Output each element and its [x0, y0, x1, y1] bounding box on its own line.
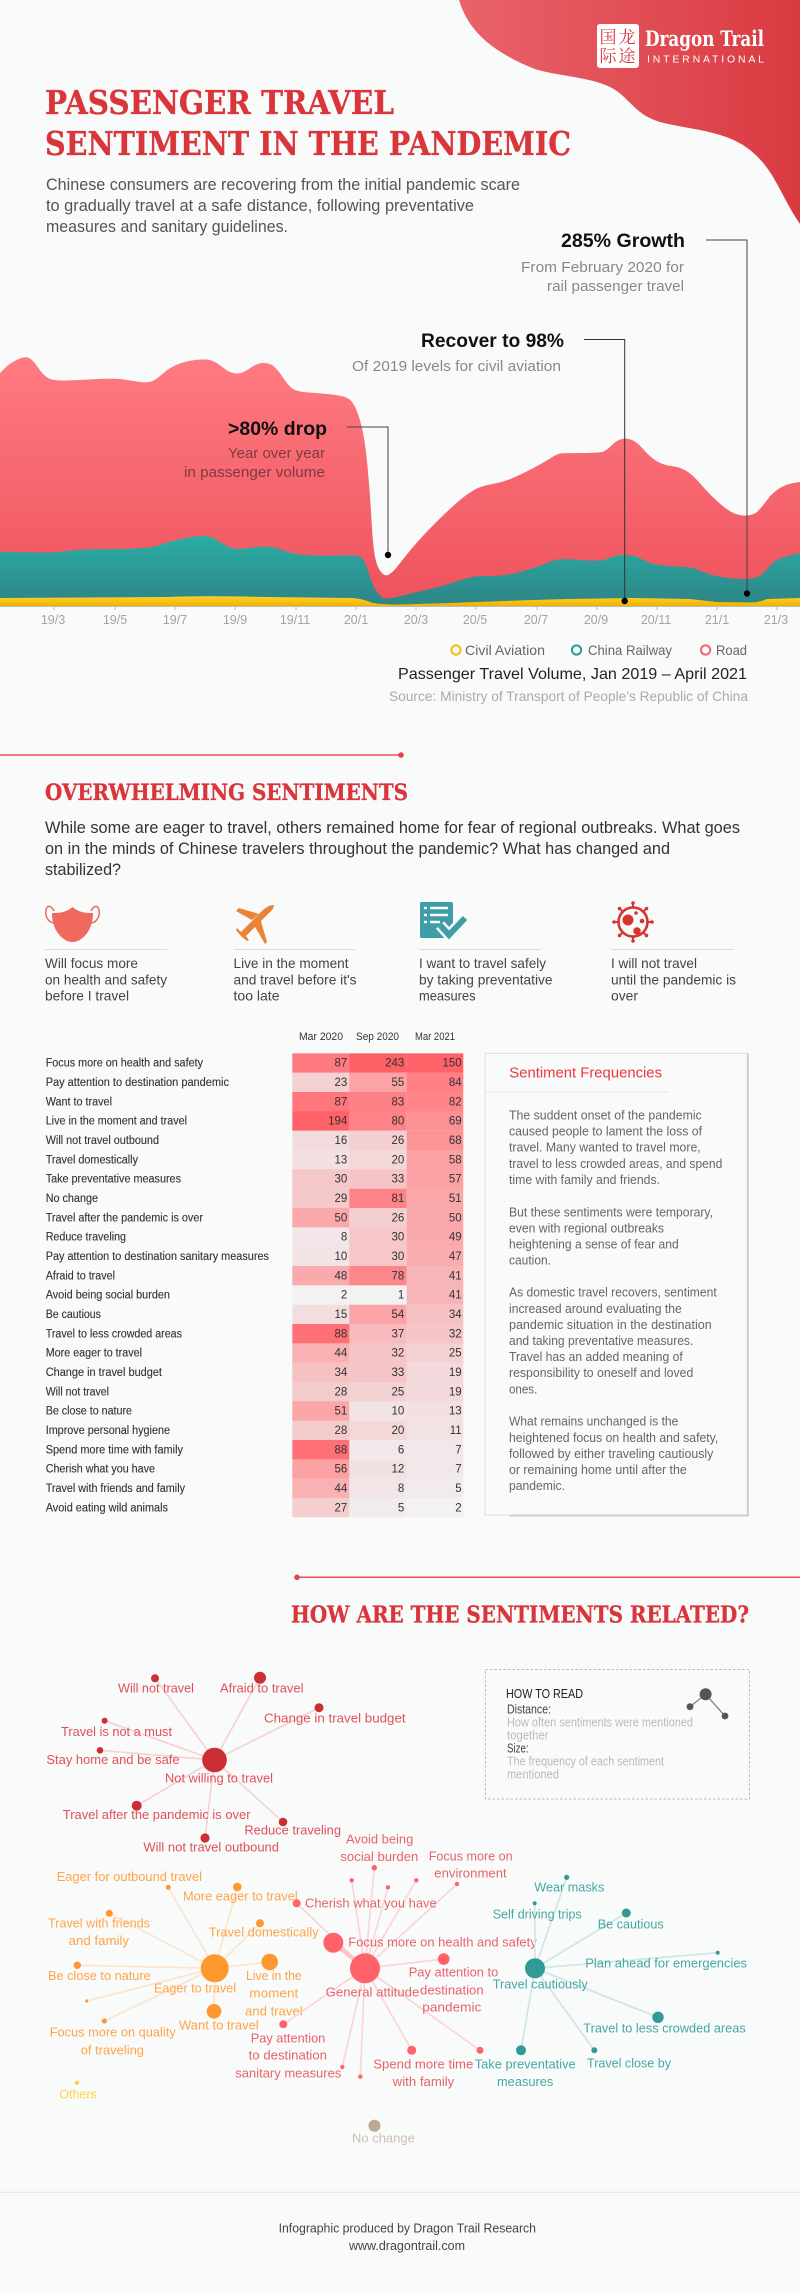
panel body text: heightened focus on health and safety,	[509, 1430, 718, 1445]
row: take preventative measures	[46, 1169, 463, 1189]
row: improve personal hygiene	[46, 1421, 463, 1440]
footer credit	[279, 2220, 536, 2253]
row: pay attention to destination pandemic: 55	[392, 1077, 404, 1089]
row: spend more time with family: 6	[398, 1444, 404, 1456]
panel body text: increased around evaluating the	[509, 1301, 682, 1316]
title: SENTIMENT IN THE PANDEMIC	[45, 124, 571, 163]
icon: checklist	[420, 902, 465, 938]
row: travel with friends and family: 8	[398, 1483, 404, 1495]
row: will not travel outbound: 68	[449, 1135, 462, 1147]
row: travel after the pandemic is over: Travel after the pandemic is over	[46, 1212, 203, 1224]
row: be close to nature: 10	[392, 1406, 404, 1418]
row: want to travel: 87	[335, 1096, 347, 1108]
network cluster: general attitude: Pay attention	[251, 2030, 325, 2045]
sentiment item: travel safely	[419, 902, 553, 1004]
network cluster: eager to travel: Want to travel	[179, 2017, 259, 2032]
callout: recover to 98%: Of 2019 levels for civil aviation	[352, 358, 561, 375]
network cluster: travel cautiously: Plan ahead for emergencies	[585, 1955, 747, 1970]
network node: no change	[352, 2120, 415, 2145]
network cluster: eager to travel	[48, 1869, 319, 2057]
row: no change: 29	[335, 1193, 347, 1205]
row: travel to less crowded areas: Travel to less crowded areas	[46, 1328, 182, 1340]
row: no change: 51	[449, 1193, 462, 1205]
sentiment item: will not travel	[611, 901, 736, 1004]
row: take preventative measures: 57	[449, 1174, 462, 1186]
row: travel to less crowded areas: 32	[449, 1328, 462, 1340]
row: be cautious	[46, 1305, 463, 1324]
row: no change: 81	[392, 1193, 404, 1205]
sentiment item: health and safety: before I travel	[45, 988, 129, 1004]
network cluster: travel cautiously: measures	[497, 2074, 554, 2089]
network cluster: eager to travel: Live in the	[246, 1968, 302, 1983]
how to read legend: together	[507, 1728, 548, 1742]
row: travel after the pandemic is over: 50	[449, 1212, 462, 1224]
row: more eager to travel: More eager to travel	[46, 1348, 142, 1360]
row: live in the moment and travel: 69	[449, 1116, 462, 1128]
row: want to travel: 83	[392, 1096, 404, 1108]
row: improve personal hygiene: 11	[450, 1425, 462, 1437]
row: change in travel budget: 34	[335, 1367, 348, 1379]
how to read legend: How often sentiments were mentioned	[507, 1715, 693, 1729]
x axis labels: 20/5	[463, 613, 487, 627]
table column headers: Mar 2021	[415, 1031, 455, 1043]
network cluster: not willing to travel: Change in travel budget	[264, 1710, 406, 1725]
row: avoid being social burden	[46, 1285, 463, 1305]
row: afraid to travel: Afraid to travel	[46, 1270, 115, 1282]
network cluster: eager to travel: Focus more on quality	[50, 2025, 176, 2040]
network cluster: not willing to travel: Not willing to travel	[165, 1771, 273, 1786]
row: take preventative measures: 30	[335, 1174, 347, 1186]
row: be close to nature	[46, 1401, 463, 1421]
row: travel domestically: 13	[335, 1154, 347, 1166]
network cluster: not willing to travel: Travel after the pandemic is over	[63, 1807, 251, 1822]
row: reduce traveling	[46, 1227, 463, 1247]
area chart: passenger travel volume	[0, 357, 800, 627]
panel body text: caution.	[509, 1253, 551, 1268]
network cluster: general attitude: destination	[420, 1982, 484, 1997]
chart legend: China Railway	[588, 642, 672, 658]
sentiment item: travel safely: by taking preventative	[419, 972, 553, 988]
network cluster: eager to travel: and family	[69, 1933, 130, 1948]
sentiment item: live in the moment: and travel before it's	[234, 972, 356, 988]
sentiment item: live in the moment	[234, 905, 356, 1004]
row: avoid eating wild animals: 27	[335, 1502, 347, 1514]
panel heading: Sentiment Frequencies	[509, 1065, 662, 1082]
row: live in the moment and travel: Live in the moment and travel	[46, 1116, 187, 1128]
row: no change	[46, 1189, 463, 1208]
how to read legend	[486, 1670, 750, 1799]
table column headers: Sep 2020	[356, 1031, 399, 1043]
intro text: measures and sanitary guidelines.	[46, 218, 288, 236]
row: avoid being social burden: 2	[341, 1290, 347, 1302]
row: more eager to travel: 25	[449, 1348, 462, 1360]
road area	[0, 357, 800, 606]
logo: Dragon Trail International	[597, 23, 764, 68]
callout: over 80% drop: Year over year	[228, 445, 325, 462]
intro text: to gradually travel at a safe distance, following preventative	[46, 197, 474, 215]
row: travel domestically: Travel domestically	[46, 1154, 138, 1166]
row: be cautious: 34	[449, 1309, 462, 1321]
row: pay attention to destination sanitary measures: 47	[449, 1251, 462, 1263]
table column headers	[299, 1031, 455, 1043]
china railway area	[0, 536, 800, 606]
row: be cautious: Be cautious	[46, 1309, 101, 1321]
intro text: Chinese consumers are recovering from the initial pandemic scare	[46, 176, 520, 194]
network cluster: eager to travel: Travel with friends	[48, 1915, 150, 1930]
title: PASSENGER TRAVEL	[45, 83, 394, 122]
network cluster: not willing to travel: Will not travel outbound	[143, 1840, 279, 1855]
network cluster: travel cautiously: Travel close by	[587, 2055, 671, 2070]
row: travel after the pandemic is over	[46, 1208, 463, 1228]
network cluster: eager to travel: of traveling	[81, 2042, 144, 2057]
callout: recover to 98%: Recover to 98%	[421, 331, 564, 352]
network cluster: travel cautiously: Take preventative	[475, 2056, 576, 2071]
row: travel to less crowded areas: 88	[335, 1328, 347, 1340]
row: avoid eating wild animals	[46, 1498, 463, 1517]
x axis labels	[41, 606, 788, 627]
sentiment item: health and safety	[45, 906, 167, 1004]
row: be close to nature: Be close to nature	[46, 1406, 132, 1418]
row: want to travel: Want to travel	[46, 1096, 112, 1108]
callout: over 80% drop	[184, 419, 391, 558]
row: spend more time with family: 88	[335, 1444, 347, 1456]
callout: recover to 98%	[352, 331, 628, 604]
network cluster: general attitude: environment	[434, 1866, 507, 1881]
row: live in the moment and travel: 80	[392, 1116, 404, 1128]
sentiment item: health and safety: Will focus more	[45, 955, 138, 971]
panel body text: As domestic travel recovers, sentiment	[509, 1285, 717, 1300]
network cluster: travel cautiously: Travel cautiously	[493, 1976, 588, 1991]
network cluster: general attitude: with family	[392, 2074, 455, 2089]
panel body text: pandemic.	[509, 1478, 565, 1493]
row: be close to nature: 13	[449, 1406, 462, 1418]
panel body text: travel to less crowded areas, and spend	[509, 1156, 722, 1171]
chart legend	[451, 642, 747, 658]
row: pay attention to destination pandemic: Pay attention to destination pandemic	[46, 1077, 229, 1089]
network node: no change: No change	[352, 2130, 415, 2145]
row: will not travel outbound: Will not travel outbound	[46, 1135, 159, 1147]
row: will not travel: 25	[392, 1386, 404, 1398]
chart caption and source: Passenger Travel Volume, Jan 2019 – April 2021	[398, 666, 747, 683]
section intro text: on in the minds of Chinese travelers throughout the pandemic? What has changed and	[45, 839, 670, 858]
panel body text: The suddent onset of the pandemic	[509, 1108, 702, 1122]
network cluster: general attitude: Spend more time	[373, 2056, 473, 2071]
table column headers: Mar 2020	[299, 1031, 343, 1043]
network cluster: general attitude	[235, 1831, 537, 2089]
network cluster: eager to travel: and travel	[245, 2003, 303, 2018]
row: will not travel: 28	[335, 1386, 347, 1398]
row: more eager to travel: 44	[335, 1348, 348, 1360]
row: travel with friends and family: 5	[455, 1483, 462, 1495]
row: travel to less crowded areas: 37	[392, 1328, 404, 1340]
panel body text: responsibility to oneself and loved	[509, 1365, 693, 1380]
row: be cautious: 15	[335, 1309, 347, 1321]
row: be cautious: 54	[392, 1309, 405, 1321]
section intro text: stabilized?	[45, 860, 121, 879]
row: afraid to travel: 41	[449, 1270, 462, 1282]
chart caption and source: Source: Ministry of Transport of People's Republic of China	[389, 688, 748, 704]
panel body text: caused people to lament the loss of	[509, 1124, 702, 1139]
network cluster: eager to travel: Travel domestically	[209, 1925, 319, 1940]
row: pay attention to destination sanitary measures: 10	[335, 1251, 347, 1263]
row: avoid eating wild animals: 5	[398, 1502, 404, 1514]
network node: others: Others	[59, 2086, 97, 2101]
x axis labels: 20/11	[641, 613, 671, 627]
network cluster: travel cautiously: Self driving trips	[493, 1906, 582, 1921]
row: take preventative measures: Take preventative measures	[46, 1174, 181, 1186]
sentiment item: will not travel: over	[611, 988, 638, 1004]
row: travel with friends and family	[46, 1479, 463, 1498]
network cluster: not willing to travel: Reduce traveling	[244, 1822, 341, 1837]
row: pay attention to destination sanitary measures	[46, 1247, 463, 1266]
row: focus more on health and safety: 150	[443, 1058, 462, 1070]
row: avoid being social burden: Avoid being social burden	[46, 1290, 170, 1302]
sentiment frequency heat table	[46, 1031, 463, 1517]
row: be close to nature: 51	[335, 1406, 347, 1418]
row: reduce traveling: 49	[449, 1232, 462, 1244]
network cluster: general attitude: Focus more on	[429, 1848, 513, 1863]
section intro text: While some are eager to travel, others remained home for fear of regional outbreaks. What goes	[45, 818, 740, 837]
section intro text	[45, 818, 740, 879]
row: live in the moment and travel: 194	[328, 1116, 348, 1128]
row: pay attention to destination sanitary measures: 30	[392, 1251, 404, 1263]
panel body text: time with family and friends.	[509, 1172, 660, 1187]
panel body text: But these sentiments were temporary,	[509, 1204, 713, 1219]
logo: Dragon Trail International: 国	[600, 23, 616, 48]
x axis labels: 20/1	[344, 613, 368, 627]
row: focus more on health and safety: Focus more on health and safety	[46, 1058, 203, 1070]
row: travel domestically	[46, 1150, 463, 1170]
network cluster: eager to travel: Eager for outbound travel	[57, 1869, 202, 1884]
logo: Dragon Trail International: 途	[618, 42, 636, 67]
network cluster: general attitude: Focus more on health and safety	[348, 1935, 537, 1950]
how to read legend: The frequency of each sentiment	[507, 1754, 664, 1768]
chart caption and source	[389, 666, 748, 704]
network cluster: travel cautiously: Be cautious	[598, 1917, 664, 1932]
callout: 285% growth: From February 2020 for	[521, 259, 684, 276]
network cluster: travel cautiously: Travel to less crowded areas	[583, 2021, 746, 2036]
civil aviation area	[0, 596, 800, 606]
logo: Dragon Trail International: INTERNATIONAL	[647, 53, 764, 65]
row: travel with friends and family: 44	[335, 1483, 348, 1495]
row: afraid to travel: 78	[392, 1270, 404, 1282]
x axis labels: 21/3	[764, 613, 788, 627]
network cluster: not willing to travel	[46, 1672, 406, 1855]
row: afraid to travel	[46, 1266, 463, 1286]
row: avoid being social burden: 41	[449, 1290, 462, 1302]
icon: virus	[612, 901, 654, 943]
row: will not travel outbound	[46, 1131, 463, 1150]
row: will not travel: 19	[449, 1386, 462, 1398]
row: reduce traveling: 30	[392, 1232, 404, 1244]
row: change in travel budget	[46, 1363, 463, 1382]
row: spend more time with family: 7	[455, 1444, 462, 1456]
network cluster: general attitude: social burden	[340, 1849, 418, 1864]
row: will not travel: Will not travel	[46, 1386, 109, 1398]
row: travel domestically: 58	[449, 1154, 462, 1166]
panel: sentiment frequencies	[485, 1053, 748, 1516]
logo: Dragon Trail International: 际	[600, 42, 618, 67]
network cluster: eager to travel: More eager to travel	[183, 1889, 298, 1904]
network cluster: general attitude: sanitary measures	[235, 2065, 342, 2080]
row: travel with friends and family: Travel with friends and family	[46, 1483, 185, 1495]
row: avoid eating wild animals: 2	[455, 1502, 462, 1514]
panel body text: followed by either traveling cautiously	[509, 1446, 714, 1461]
sentiment item: live in the moment: Live in the moment	[234, 955, 349, 971]
row: reduce traveling: 8	[341, 1232, 347, 1244]
row: travel to less crowded areas	[46, 1324, 463, 1344]
row: change in travel budget: 19	[449, 1367, 462, 1379]
row: focus more on health and safety: 87	[335, 1058, 347, 1070]
sentiment item: health and safety: on health and safety	[45, 972, 167, 988]
panel body text: What remains unchanged is the	[509, 1414, 678, 1429]
sentiment item: travel safely: measures	[419, 988, 476, 1004]
row: cherish what you have	[46, 1459, 463, 1479]
x axis labels: 20/9	[584, 613, 608, 627]
intro text	[46, 176, 520, 236]
network cluster: general attitude: Avoid being	[346, 1831, 413, 1846]
panel body text: and taking preventative measures.	[509, 1333, 693, 1348]
network cluster: not willing to travel: Travel is not a must	[61, 1724, 172, 1739]
how to read legend: Size:	[507, 1741, 529, 1755]
row: change in travel budget: 33	[392, 1367, 404, 1379]
how to read legend: HOW TO READ	[506, 1687, 583, 1701]
row: improve personal hygiene: Improve personal hygiene	[46, 1425, 170, 1437]
row: will not travel outbound: 26	[392, 1135, 404, 1147]
callout: 285% growth: 285% Growth	[561, 231, 685, 252]
row: change in travel budget: Change in travel budget	[46, 1367, 163, 1379]
network cluster: general attitude: to destination	[249, 2048, 327, 2063]
panel body text: ones.	[509, 1382, 537, 1396]
row: more eager to travel	[46, 1343, 463, 1363]
row: avoid eating wild animals: Avoid eating wild animals	[46, 1502, 168, 1514]
network cluster: travel cautiously: Wear masks	[534, 1880, 605, 1895]
callout: over 80% drop: >80% drop	[228, 419, 327, 440]
sentiment item: will not travel: I will not travel	[611, 955, 697, 971]
network cluster: general attitude: Pay attention to	[409, 1965, 498, 1980]
row: live in the moment and travel	[46, 1111, 463, 1131]
x axis labels: 20/3	[404, 613, 428, 627]
row: want to travel	[46, 1092, 463, 1112]
x axis labels: 19/3	[41, 613, 65, 627]
panel body text: even with regional outbreaks	[509, 1220, 664, 1235]
row: improve personal hygiene: 28	[335, 1425, 347, 1437]
logo: Dragon Trail International: 龙	[618, 23, 636, 48]
panel body text: Travel has an added meaning of	[509, 1349, 683, 1364]
row: pay attention to destination pandemic: 84	[449, 1077, 462, 1089]
row: travel after the pandemic is over: 26	[392, 1212, 404, 1224]
icon: face mask	[46, 906, 99, 942]
network cluster: eager to travel: Eager to travel	[154, 1980, 236, 1995]
panel body text: heightening a sense of fear and	[509, 1236, 679, 1252]
row: travel domestically: 20	[392, 1154, 404, 1166]
row: afraid to travel: 48	[335, 1270, 347, 1282]
row: avoid being social burden: 1	[398, 1290, 404, 1302]
row: focus more on health and safety	[46, 1053, 463, 1073]
network cluster: not willing to travel: Afraid to travel	[220, 1680, 304, 1695]
row: take preventative measures: 33	[392, 1174, 404, 1186]
icon: node link example	[687, 1688, 728, 1719]
row: want to travel: 82	[449, 1096, 462, 1108]
x axis labels: 19/5	[103, 613, 127, 627]
row: cherish what you have: 12	[392, 1464, 404, 1476]
network cluster: general attitude: Cherish what you have	[305, 1896, 437, 1911]
network cluster: not willing to travel: Will not travel	[118, 1680, 194, 1695]
row: reduce traveling: Reduce traveling	[46, 1232, 126, 1244]
network cluster: not willing to travel: Stay home and be safe	[46, 1752, 180, 1767]
callout: 285% growth	[521, 231, 750, 597]
row: cherish what you have: Cherish what you have	[46, 1464, 155, 1476]
title	[45, 83, 571, 163]
x axis labels: 19/11	[280, 613, 310, 627]
network cluster: general attitude: General attitude	[326, 1985, 419, 2000]
heading: overwhelming sentiments: OVERWHELMING SENTIMENTS	[45, 780, 408, 806]
network cluster: travel cautiously	[475, 1875, 747, 2089]
sentiment item: live in the moment: too late	[234, 988, 280, 1004]
callout: 285% growth: rail passenger travel	[547, 278, 684, 295]
panel body text	[509, 1108, 722, 1493]
row: spend more time with family	[46, 1440, 463, 1460]
how to read legend: mentioned	[507, 1767, 559, 1781]
panel body text: travel. Many wanted to travel more,	[509, 1140, 701, 1155]
chart legend: Road	[716, 642, 747, 658]
row: cherish what you have: 7	[455, 1464, 462, 1476]
row: will not travel outbound: 16	[335, 1135, 347, 1147]
x axis labels: 19/7	[163, 613, 187, 627]
network cluster: eager to travel: moment	[249, 1986, 299, 2001]
row: travel after the pandemic is over: 50	[335, 1212, 347, 1224]
logo: Dragon Trail International: Dragon Trail	[645, 26, 764, 51]
icon: airplane	[236, 905, 274, 944]
x axis labels: 19/9	[223, 613, 247, 627]
row: no change: No change	[46, 1193, 98, 1205]
footer credit: Infographic produced by Dragon Trail Research	[279, 2220, 536, 2235]
x axis labels: 21/1	[705, 613, 729, 627]
row: pay attention to destination sanitary measures: Pay attention to destination sanitary measures	[46, 1251, 269, 1263]
sentiment item: travel safely: I want to travel safely	[419, 955, 546, 971]
row: cherish what you have: 56	[335, 1464, 347, 1476]
row: pay attention to destination pandemic	[46, 1073, 463, 1092]
x axis labels: 20/7	[524, 613, 548, 627]
network cluster: eager to travel: Be close to nature	[48, 1968, 151, 1983]
row: improve personal hygiene: 20	[392, 1425, 404, 1437]
row: focus more on health and safety: 243	[385, 1058, 404, 1070]
chart legend: Civil Aviation	[465, 642, 545, 658]
how to read legend: Distance:	[507, 1703, 551, 1717]
decorative header blob	[459, 0, 800, 224]
row: pay attention to destination pandemic: 23	[335, 1077, 347, 1089]
panel body text: or remaining home until after the	[509, 1462, 687, 1477]
callout: over 80% drop: in passenger volume	[184, 464, 325, 481]
footer credit: www.dragontrail.com	[348, 2238, 465, 2253]
row: more eager to travel: 32	[392, 1348, 404, 1360]
network cluster: general attitude: pandemic	[422, 2000, 482, 2015]
panel body text: pandemic situation in the destination	[509, 1317, 712, 1332]
row: will not travel	[46, 1382, 463, 1402]
row: spend more time with family: Spend more time with family	[46, 1444, 183, 1456]
sentiment item: will not travel: until the pandemic is	[611, 972, 736, 988]
